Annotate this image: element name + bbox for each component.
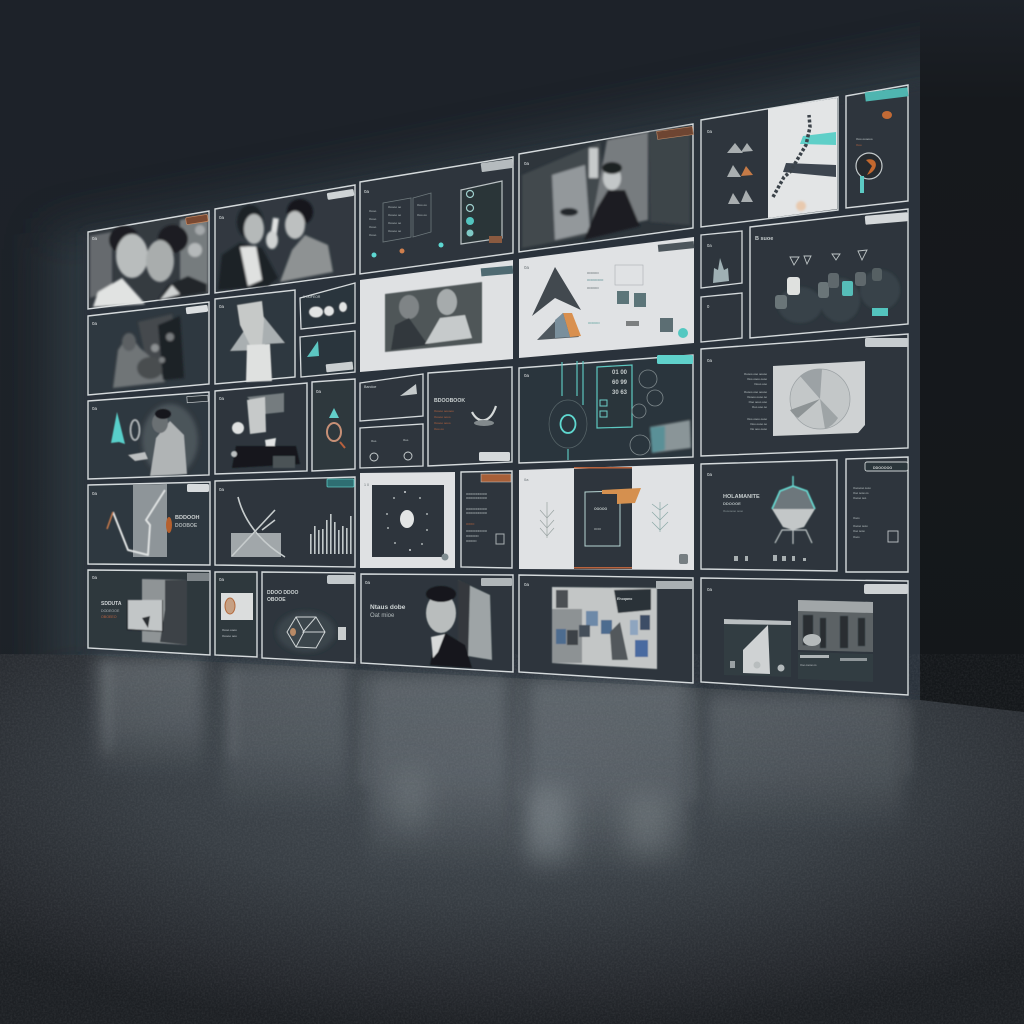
- teal tag: [657, 355, 693, 364]
- panel: smiling man: [361, 574, 513, 672]
- icon: magnifier: [327, 423, 345, 448]
- white half: [768, 98, 837, 218]
- panel: text column right: Ooo oooo: [853, 529, 865, 533]
- panel: geodesic lander: DDOOOE: [723, 501, 741, 506]
- orange tag: [481, 474, 511, 482]
- panel: small map: [300, 283, 355, 329]
- panel: dark text column: OOOOOOOOOO: [466, 507, 487, 511]
- badge: [679, 554, 688, 564]
- icon: teal arrow: [307, 341, 319, 357]
- organic outlines: [630, 370, 663, 455]
- headline: HOLAMANITE: [723, 494, 760, 500]
- panel: bottom right data slide: 0a: [707, 587, 713, 592]
- panel: white triangle slide: [519, 237, 694, 358]
- panel: row 2 figure with triangle: 0a: [219, 304, 225, 309]
- text blocks: OOOOOOO: [587, 278, 604, 282]
- table columns: Ooooo oo: [388, 229, 402, 233]
- panel: bottom right data slide: Ooo ooooo oo: [800, 663, 817, 667]
- panel: text column right: Oooo: [853, 535, 860, 539]
- tag outline: [865, 462, 908, 471]
- text block: [744, 372, 767, 431]
- panel: dark text column: OOOOOOOOOO: [466, 496, 487, 500]
- panel: dark text column: OOOOO: [466, 539, 476, 543]
- panel: geodesic lander: Oooooooo oooo: [723, 509, 744, 513]
- panel: teal schematic: 60 99: [612, 380, 628, 386]
- panel: text column right: Ooooo ooo: [853, 496, 867, 500]
- ring: [549, 400, 587, 448]
- panel: dark text column: OOOOOOOOOO: [466, 511, 487, 515]
- panel: text column right: Ooooooo oooo: [853, 486, 871, 490]
- reflection highlights: [395, 770, 670, 860]
- heading: B suoe: [755, 236, 773, 242]
- panel: white orbit slide: [360, 472, 455, 568]
- panel: row 5 headline collage: [88, 570, 210, 655]
- photo: couple portrait: [90, 214, 208, 307]
- panel: row 2 crowd photo: 0a: [92, 321, 98, 326]
- panel: small dials: [360, 424, 423, 468]
- dark central band: [574, 467, 632, 569]
- panel: row 3 magnifier: [312, 379, 355, 471]
- floor: [0, 654, 1024, 1024]
- floor reflections: [96, 658, 903, 880]
- orange text: Ooooo oooooo: [434, 409, 454, 413]
- panel: white card slide: 0a: [524, 477, 529, 482]
- pie card: [773, 361, 865, 436]
- legend box: [461, 181, 502, 244]
- headline: DDOO DDOO: [267, 590, 298, 596]
- text block: Ooo oooo oooo: [747, 377, 767, 381]
- panel: dark text column: OOOOOOOOOO: [466, 529, 487, 533]
- tag: [481, 159, 514, 172]
- panel: pyramids and stairs: [701, 97, 838, 227]
- panel: column 4 boy portrait: [519, 124, 693, 252]
- table columns: Oooo: [369, 233, 377, 237]
- panel: orange dial poster: Ooo: [856, 143, 862, 147]
- panel: teal schematic: 30 63: [612, 390, 628, 396]
- panel: dark text column: OOOOOOOOOO: [466, 492, 487, 496]
- tag: [186, 214, 208, 225]
- card: chart: [724, 619, 791, 677]
- panel: dark text column: [461, 471, 512, 568]
- panel: row 5 narrow card: 0a: [219, 577, 225, 582]
- panel: empty small: [701, 293, 742, 342]
- photo inset: [231, 533, 281, 557]
- table columns: Ooooo oo: [388, 221, 402, 225]
- tag: [479, 452, 510, 461]
- panel: white card slide: OOOOO: [594, 507, 608, 511]
- panel: cylinders: [750, 209, 908, 338]
- sprigs: [540, 502, 668, 538]
- chart: area: [400, 384, 417, 396]
- table columns: Ooo oo: [417, 203, 427, 207]
- photo: smiling man: [426, 580, 492, 668]
- cylinders: [775, 268, 882, 309]
- timeline dots: [372, 252, 376, 258]
- panel: row 1 two faces: [88, 211, 209, 309]
- table columns: Oooo: [369, 209, 377, 213]
- table columns: Ooooo oo: [388, 213, 402, 217]
- panel: small map: 0 ODFEOR: [303, 295, 321, 299]
- text block: Oo ooo oooo: [750, 427, 767, 431]
- floor texture: [0, 654, 1024, 1024]
- panel: small arrow: [300, 331, 355, 377]
- panel: row 5 headline collage: DODEOOE: [101, 609, 120, 613]
- icons: pyramid stacks: [727, 143, 753, 204]
- panel: row 3 stage poster: 0a: [219, 396, 225, 401]
- icon: dial: [856, 153, 882, 193]
- panel: row 4 staircase collage: [88, 482, 210, 565]
- tag: [656, 581, 693, 589]
- dark bar: [783, 163, 836, 177]
- orange text: Ooo oo: [434, 427, 444, 431]
- panel: row 2 crowd photo: [88, 302, 209, 395]
- panel: row 4 staircase collage: 0a: [92, 491, 98, 496]
- tag: [481, 578, 512, 586]
- tag: [327, 575, 355, 584]
- tag: [864, 584, 908, 594]
- table columns: [369, 193, 431, 242]
- schematic lines: [562, 361, 583, 460]
- tag: [865, 338, 908, 347]
- panel: teal schematic: [519, 355, 693, 463]
- photo: stage scene: [231, 393, 300, 468]
- photo: collage figure: [230, 301, 285, 382]
- wall glow: [50, 50, 960, 730]
- text block: Oooo ooo: [754, 382, 767, 386]
- book card: [585, 491, 620, 546]
- icon: dial rings: [370, 452, 412, 461]
- panel: column 4 boy portrait: 0a: [524, 161, 530, 166]
- tag: [481, 266, 513, 276]
- shadows: [778, 270, 900, 323]
- table columns: Oooo: [369, 225, 377, 229]
- tag: [186, 305, 208, 314]
- photo: presenter: [142, 404, 198, 476]
- panel: row 2 figure with triangle: [215, 290, 295, 384]
- panel: dark text column: OOOO: [466, 522, 474, 526]
- panel: teal schematic: 01 00: [612, 370, 628, 376]
- panel: white card slide: [519, 464, 694, 570]
- orange text: [434, 409, 454, 431]
- text block: Ooo oooo ooo: [749, 400, 767, 404]
- panel: geodesic lander: [701, 460, 837, 571]
- pie chart: [790, 369, 850, 429]
- panel: text column right: [846, 457, 908, 572]
- icon: teal badge: [678, 328, 688, 338]
- panel: row 5 hexagon: OBOOE: [267, 597, 286, 603]
- tag: [327, 189, 354, 200]
- icon: teal triangle: [329, 408, 339, 418]
- panel: row 4 charts: [215, 477, 355, 567]
- icon: triangle logo: [532, 267, 581, 316]
- panel: row 5 narrow card: Ooooo ooo: [222, 634, 237, 638]
- panel: column 3 table: 0a: [364, 189, 370, 194]
- photo: crowd: [798, 600, 873, 652]
- panel: row 5 narrow card: [215, 572, 257, 657]
- tag: [658, 241, 694, 252]
- text block: Ooooo oooo oo: [747, 395, 767, 399]
- panel: white orbit slide: 1 0: [364, 483, 369, 487]
- panel: teal schematic: 0a: [524, 373, 530, 378]
- map fold: [650, 420, 691, 453]
- panel: row 3 magnifier: 0a: [316, 389, 322, 394]
- panel: pie slide: 0a: [707, 358, 713, 363]
- panel: small column chart: [701, 231, 742, 288]
- photo: two people: [385, 282, 482, 352]
- panel: orange dial poster: [846, 85, 908, 208]
- panel: white card slide: OOO: [594, 527, 602, 531]
- teal tag: [865, 87, 908, 102]
- icon: world map blob: [309, 302, 347, 318]
- panel: row 3 presenter: [88, 392, 209, 479]
- teal tag: [327, 479, 354, 487]
- photo: men talking: [218, 199, 333, 290]
- icon: crown chart: [713, 258, 729, 283]
- icon: antlers: [472, 406, 496, 426]
- panel: empty small: 0: [707, 304, 710, 309]
- panel: column 3 table: [360, 157, 514, 274]
- panel: small dials: Ooo: [371, 439, 377, 443]
- photo collage: [127, 579, 187, 645]
- panel: white photo slide: [360, 260, 513, 372]
- panel: orange dial poster: Ooo oooooo: [856, 137, 873, 141]
- panel: photo wall slide: [519, 575, 693, 683]
- bar chart: [310, 514, 352, 554]
- orbit diagram: [386, 491, 428, 551]
- tag: [187, 573, 209, 581]
- panel: row 3 stage poster: [215, 383, 307, 474]
- panel: small trend: [360, 374, 423, 421]
- reflection streaks: [105, 662, 911, 800]
- text blocks: OOOOO: [588, 321, 600, 325]
- panel: row 5 headline collage: OBOEEO: [101, 615, 117, 619]
- panel: row 1 two men gesture: 0a: [219, 215, 225, 220]
- tag: [187, 484, 209, 492]
- panel: text column right: Ooo oooo oo: [853, 491, 869, 495]
- headline: Ntaus dobe: [370, 604, 406, 611]
- panel: dark text column: OOOOOO: [466, 534, 479, 538]
- orange text: Ooooo oooo: [434, 421, 451, 425]
- orange text: Ooooo oooo: [434, 415, 451, 419]
- orange ribbon: [602, 488, 641, 504]
- text blocks: [587, 271, 604, 325]
- text block: Ooo ooo oo: [752, 405, 767, 409]
- icon: orange spark: [882, 111, 892, 119]
- teal tag: [872, 308, 888, 316]
- panel: white triangle slide: 0a: [524, 265, 530, 270]
- table columns: Ooooo oo: [388, 205, 402, 209]
- tag: [187, 395, 208, 403]
- icons: funnel row: [790, 250, 867, 265]
- teal data box: [597, 365, 632, 428]
- icon: lander: [772, 476, 815, 544]
- panel: pyramids and stairs: 0a: [707, 129, 713, 134]
- headline: BDDOOH: [175, 515, 199, 521]
- panel: row 5 hexagon: [262, 572, 355, 663]
- headline: SDDUTA: [101, 601, 122, 607]
- panel: small trend: Bandoe: [364, 385, 376, 389]
- icons: squares: [617, 291, 629, 304]
- table columns: Oooo: [369, 217, 377, 221]
- stairs pattern: [773, 115, 810, 197]
- table columns: Ooo oo: [417, 213, 427, 217]
- panel: smiling man: 0a: [365, 580, 371, 585]
- panel: text column right: Oooo: [853, 516, 860, 520]
- chart line: [107, 490, 165, 555]
- text strip: [798, 652, 873, 682]
- panel: text column right: DDOOOOO: [873, 466, 892, 470]
- panel: row 4 staircase collage: DOOBOE: [175, 523, 198, 529]
- panel: smiling man: Oat mioe: [370, 613, 395, 619]
- text block: Ooooo ooo ooooo: [744, 372, 767, 376]
- panel: text column right: Ooooo oooo: [853, 524, 868, 528]
- panel: row 1 two faces: 0a: [92, 236, 98, 241]
- panel: bottom right data slide: [701, 578, 908, 695]
- panel: photo wall slide: Ehoqano: [617, 597, 633, 601]
- headline: BDOOBOOK: [434, 398, 465, 404]
- panel: row 3 presenter: 0a: [92, 406, 98, 411]
- photo: grey panel: [133, 484, 167, 557]
- text block: Ooo oooo oooo: [747, 417, 767, 421]
- panel: small dials: Ooo: [403, 438, 409, 442]
- text blocks: OOOOO: [587, 286, 599, 290]
- text block: Ooo oooo oo: [750, 422, 767, 426]
- photo: people in foliage: [113, 314, 184, 388]
- panel: pie slide: [701, 334, 908, 456]
- panel: small column chart: 0a: [707, 243, 712, 248]
- panel: row 4 charts: 0a: [219, 487, 225, 492]
- icon: hexagon diagram: [287, 617, 325, 648]
- panel: row 5 headline collage: 0a: [92, 575, 98, 580]
- text block: Ooooo ooo ooooo: [744, 390, 767, 394]
- dark square: [372, 485, 444, 557]
- panel: row 5 narrow card: Oooo oooo: [222, 628, 237, 632]
- teal bar: [800, 132, 836, 145]
- all panels: [88, 85, 908, 695]
- tag: [657, 127, 693, 139]
- photo: gallery: [552, 587, 657, 669]
- right side shadow: [920, 0, 1024, 720]
- icon row: [734, 555, 806, 561]
- text blocks: OOOOO: [587, 271, 599, 275]
- panel: orange list: [428, 367, 512, 466]
- panel: geodesic lander: 0a: [707, 472, 713, 477]
- photo card: [221, 593, 253, 620]
- panel: photo wall slide: 0a: [524, 582, 530, 587]
- photo: boy in studio: [522, 126, 690, 248]
- panel: row 1 two men gesture: [215, 185, 355, 293]
